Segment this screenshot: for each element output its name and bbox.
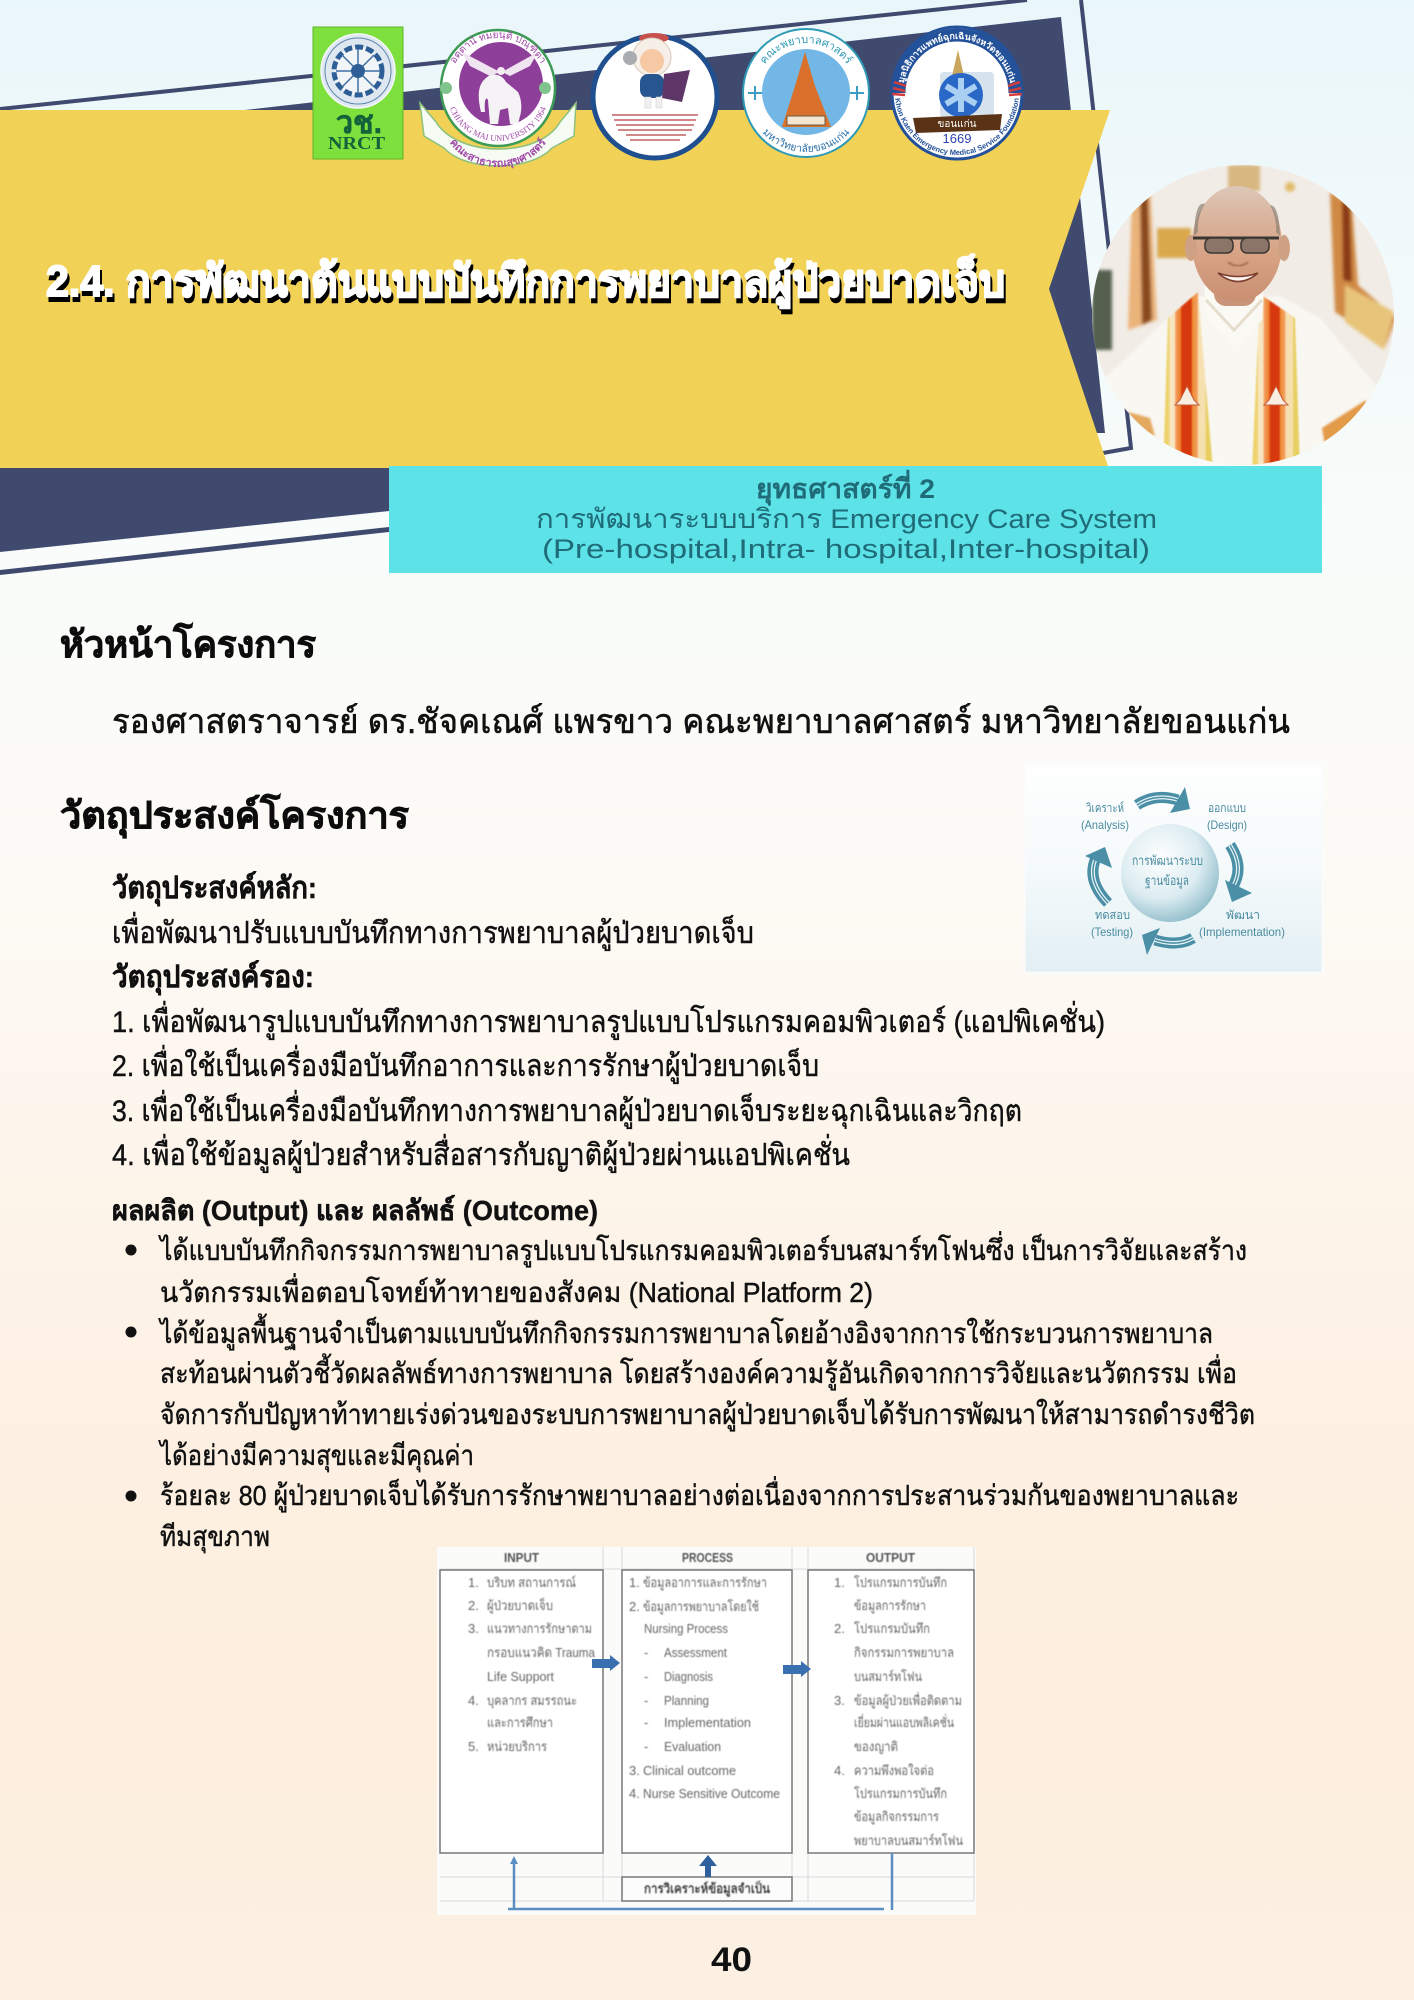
- diagram: input process output flow: [437, 1547, 976, 1915]
- arrow: process to output: [783, 1661, 811, 1677]
- panel: output: 2.: [834, 1621, 845, 1636]
- logo: Khon Kaen EMS foundation: ขอนแก่น: [937, 119, 977, 130]
- panel: process: Assessment: [664, 1645, 727, 1660]
- panel: output: 1.: [834, 1575, 845, 1590]
- logo: NRCT: วช.: [336, 105, 382, 140]
- panel: process: 3.: [629, 1763, 640, 1778]
- panel: process: -: [644, 1669, 648, 1684]
- objectives text: 2. เพื่อใช้เป็นเครื่องมือบันทึกอาการและการรักษาผู้ป่วยบาดเจ็บ: [112, 1045, 819, 1084]
- panel: input: 5.: [468, 1739, 479, 1754]
- logo: KKU nursing: มหาวิทยาลัยขอนแก่น: [763, 129, 850, 152]
- panel: process: Planning: [664, 1693, 709, 1708]
- panel: input: แนวทางการรักษาตาม: [487, 1621, 592, 1636]
- panel: output: โปรแกรมบันทึก: [854, 1621, 930, 1636]
- panel: process: Clinical outcome: [643, 1763, 736, 1778]
- panel: input: 1.: [468, 1575, 479, 1590]
- sleeve bands: [1128, 412, 1155, 436]
- panel: process: ข้อมูลอาการและการรักษา: [643, 1575, 767, 1591]
- panel: process: 2.: [629, 1599, 640, 1614]
- bullet list: ได้แบบบันทึกกิจกรรมการพยาบาลรูปแบบโปรแกรมคอมพิวเตอร์บนสมาร์ทโฟนซึ่ง เป็นการวิจัยและสร้าง: [158, 1231, 1247, 1268]
- panel: output: [808, 1550, 974, 1853]
- panel: output: พยาบาลบนสมาร์ทโฟน: [854, 1833, 963, 1848]
- panel: process: Nurse Sensitive Outcome: [643, 1786, 780, 1801]
- diagram: development cycle: ฐานข้อมูล: [1145, 873, 1189, 889]
- panel: input: [440, 1550, 603, 1853]
- feedback loop line: [508, 1853, 892, 1910]
- title: 2.4. การพัฒนาต้นแบบบันทึกการพยาบาลผู้ป่วยบาดเจ็บ: [46, 254, 1005, 308]
- panel: process: Diagnosis: [664, 1669, 713, 1684]
- objectives text: วัตถุประสงค์หลัก:: [112, 871, 317, 907]
- panel: process: Nursing Process: [644, 1621, 728, 1636]
- strategy heading: ยุทธศาสตร์ที่ 2: [756, 469, 935, 506]
- panel: output: ข้อมูลผู้ป่วยเพื่อติดตาม: [854, 1692, 962, 1709]
- objectives text: 4. เพื่อใช้ข้อมูลผู้ป่วยสำหรับสื่อสารกับญาติผู้ป่วยผ่านแอปพิเคชั่น: [112, 1134, 850, 1173]
- sash emblems: [1175, 386, 1288, 405]
- panel: input: 3.: [468, 1621, 479, 1636]
- project lead name: รองศาสตราจารย์ ดร.ชัจคเณศ์ แพรขาว คณะพยาบาลศาสตร์ มหาวิทยาลัยขอนแก่น: [112, 703, 1290, 741]
- logo: NRCT: NRCT: [328, 133, 385, 153]
- left sash: [1163, 292, 1213, 470]
- diagram: development cycle: การพัฒนาระบบ: [1132, 853, 1203, 868]
- diagram: development cycle: (Analysis): [1081, 818, 1129, 832]
- bullet list: ได้ข้อมูลพื้นฐานจำเป็นตามแบบบันทึกกิจกรรมการพยาบาลโดยอ้างอิงจากการใช้กระบวนการพยาบาล: [158, 1313, 1213, 1351]
- diagram: development cycle: (Implementation): [1199, 925, 1285, 939]
- collar: [1204, 286, 1264, 324]
- strategy line 3: (Pre-hospital,Intra- hospital,Inter-hospital): [542, 534, 1150, 564]
- bullet list: [126, 1231, 1255, 1554]
- diagram: development cycle: [1024, 763, 1323, 973]
- arrow: analysis to design: [1137, 787, 1190, 813]
- panel: output: ข้อมูลการรักษา: [854, 1598, 926, 1614]
- box: needs analysis: [622, 1877, 792, 1901]
- objectives text: [112, 871, 1105, 1173]
- box: needs analysis: การวิเคราะห์ข้อมูลจำเป็น: [644, 1879, 770, 1897]
- strategy line 2: การพัฒนาระบบบริการ Emergency Care System: [536, 504, 1157, 534]
- panel: input: Life Support: [487, 1669, 554, 1684]
- panel: input: บุคลากร สมรรถนะ: [487, 1693, 577, 1709]
- logo: Khon Kaen EMS foundation: มูลนิธิการแพทย์ฉุกเฉินจังหวัดขอนแก่น: [898, 32, 1016, 84]
- arrow: design to implementation: [1225, 845, 1252, 902]
- heading: objectives: วัตถุประสงค์โครงการ: [60, 793, 409, 839]
- heading: outputs and outcomes: ผลผลิต (Output) และ ผลลัพธ์ (Outcome): [112, 1195, 598, 1226]
- panel: process: -: [644, 1715, 648, 1730]
- navy header panel: [245, 17, 1105, 433]
- panel: output: ข้อมูลกิจกรรมการ: [854, 1809, 939, 1825]
- panel: output: OUTPUT: [866, 1550, 915, 1565]
- panel: output: 4.: [834, 1763, 845, 1778]
- objectives text: 1. เพื่อพัฒนารูปแบบบันทึกทางการพยาบาลรูปแบบโปรแกรมคอมพิวเตอร์ (แอปพิเคชั่น): [112, 1001, 1105, 1040]
- panel: output: ความพึงพอใจต่อ: [854, 1763, 934, 1778]
- arrow head: feedback: [510, 1856, 518, 1864]
- bullet list: จัดการกับปัญหาท้าทายเร่งด่วนของระบบการพยาบาลผู้ป่วยบาดเจ็บได้รับการพัฒนาให้สามารถดำรงชีวิต: [160, 1397, 1255, 1432]
- panel: input: 4.: [468, 1693, 479, 1708]
- panel: output: ของญาติ: [854, 1739, 898, 1754]
- diagram: development cycle: พัฒนา: [1226, 908, 1260, 922]
- panel: process: -: [644, 1739, 648, 1754]
- arrow: input to process: [592, 1655, 620, 1671]
- logo: Khon Kaen EMS foundation: 1669: [943, 131, 971, 146]
- objectives text: 3. เพื่อใช้เป็นเครื่องมือบันทึกทางการพยาบาลผู้ป่วยบาดเจ็บระยะฉุกเฉินและวิกฤต: [112, 1090, 1022, 1130]
- lower left frame line: [0, 527, 389, 575]
- panel: output: โปรแกรมการบันทึก: [854, 1786, 947, 1801]
- yellow title banner: [0, 110, 1110, 468]
- logo: Khon Kaen EMS foundation: Khon Kaen Emergency Medical Service Foundation: [895, 98, 1019, 156]
- panel: process: Evaluation: [664, 1739, 721, 1754]
- strategy banner: [389, 466, 1322, 573]
- smile: [1218, 273, 1258, 282]
- panel: output: กิจกรรมการพยาบาล: [854, 1645, 954, 1660]
- panel: output: 3.: [834, 1693, 845, 1708]
- right sash: [1252, 294, 1300, 470]
- heading: project lead: หัวหน้าโครงการ: [60, 622, 316, 665]
- diagram: development cycle: (Design): [1207, 818, 1247, 832]
- nose shade: [1228, 262, 1248, 266]
- panel: process: ข้อมูลการพยาบาลโดยใช้: [643, 1599, 759, 1615]
- panel: process: -: [644, 1645, 648, 1660]
- diagram: development cycle: วิเคราะห์: [1086, 801, 1124, 815]
- logo: mascot seal: [593, 33, 717, 158]
- panel: process: Implementation: [664, 1715, 751, 1730]
- panel: input: INPUT: [504, 1550, 539, 1565]
- logo: KKU nursing: [742, 28, 870, 158]
- glasses: [1193, 236, 1279, 240]
- panel: process: PROCESS: [682, 1550, 733, 1565]
- arrow: implementation to testing: [1142, 928, 1193, 955]
- bullet list: ได้อย่างมีความสุขและมีคุณค่า: [158, 1440, 474, 1473]
- header frame line: [0, 0, 1131, 453]
- panel: output: เยี่ยมผ่านแอบพลิเคชั่น: [854, 1714, 954, 1730]
- logo: Chiang Mai University: อตฺตานํ ทมยนฺติ ปณฺฑิตา: [451, 31, 545, 64]
- diagram: development cycle: ทดสอบ: [1095, 908, 1130, 922]
- bullet list: ทีมสุขภาพ: [160, 1521, 270, 1554]
- logo: Chiang Mai University: คณะสาธารณสุขศาสตร์: [450, 136, 546, 168]
- diagram: development cycle: ออกแบบ: [1208, 801, 1246, 815]
- panel: input: กรอบแนวคิด Trauma: [487, 1645, 596, 1660]
- panel: process: [622, 1550, 792, 1853]
- objectives text: วัตถุประสงค์รอง:: [112, 960, 314, 996]
- bullet list: ร้อยละ 80 ผู้ป่วยบาดเจ็บได้รับการรักษาพยาบาลอย่างต่อเนื่องจากการประสานร่วมกันของพยาบาลและ: [160, 1476, 1239, 1513]
- logo: NRCT: [313, 27, 403, 159]
- panel: process: 4.: [629, 1786, 640, 1801]
- panel: process: -: [644, 1693, 648, 1708]
- panel: input: หน่วยบริการ: [487, 1739, 547, 1754]
- objectives text: เพื่อพัฒนาปรับแบบบันทึกทางการพยาบาลผู้ป่วยบาดเจ็บ: [112, 912, 754, 951]
- panel: output: โปรแกรมการบันทึก: [854, 1575, 947, 1590]
- arrow: analysis up to process: [699, 1855, 717, 1877]
- panel: process: 1.: [629, 1575, 640, 1590]
- logo: Chiang Mai University: [419, 28, 577, 168]
- panel: input: และการศึกษา: [487, 1715, 553, 1730]
- navy lower left band: [0, 468, 389, 552]
- portrait photo: [1090, 160, 1400, 470]
- arrow: testing to analysis: [1085, 847, 1112, 903]
- panel: input: 2.: [468, 1598, 479, 1613]
- panel: input: บริบท สถานการณ์: [487, 1575, 576, 1590]
- logo: KKU nursing: คณะพยาบาลศาสตร์: [761, 36, 854, 64]
- bullet list: สะท้อนผ่านตัวชี้วัดผลลัพธ์ทางการพยาบาล โดยสร้างองค์ความรู้อันเกิดจากการวิจัยและนวัตกรรม เพื่อ: [160, 1353, 1237, 1391]
- logo: Chiang Mai University: CHIANG MAI UNIVERSITY 1964: [450, 106, 546, 141]
- head: [1192, 186, 1282, 302]
- logo row: [312, 26, 1024, 168]
- bullet list: นวัตกรรมเพื่อตอบโจทย์ท้าทายของสังคม (National Platform 2): [160, 1273, 873, 1308]
- logo: Khon Kaen EMS foundation: [890, 26, 1024, 160]
- panel: output: บนสมาร์ทโฟน: [854, 1669, 922, 1684]
- shirt: [1106, 296, 1376, 465]
- page number: 40: [711, 1941, 752, 1979]
- diagram: development cycle: (Testing): [1091, 925, 1133, 939]
- panel: input: ผู้ป่วยบาดเจ็บ: [487, 1596, 553, 1614]
